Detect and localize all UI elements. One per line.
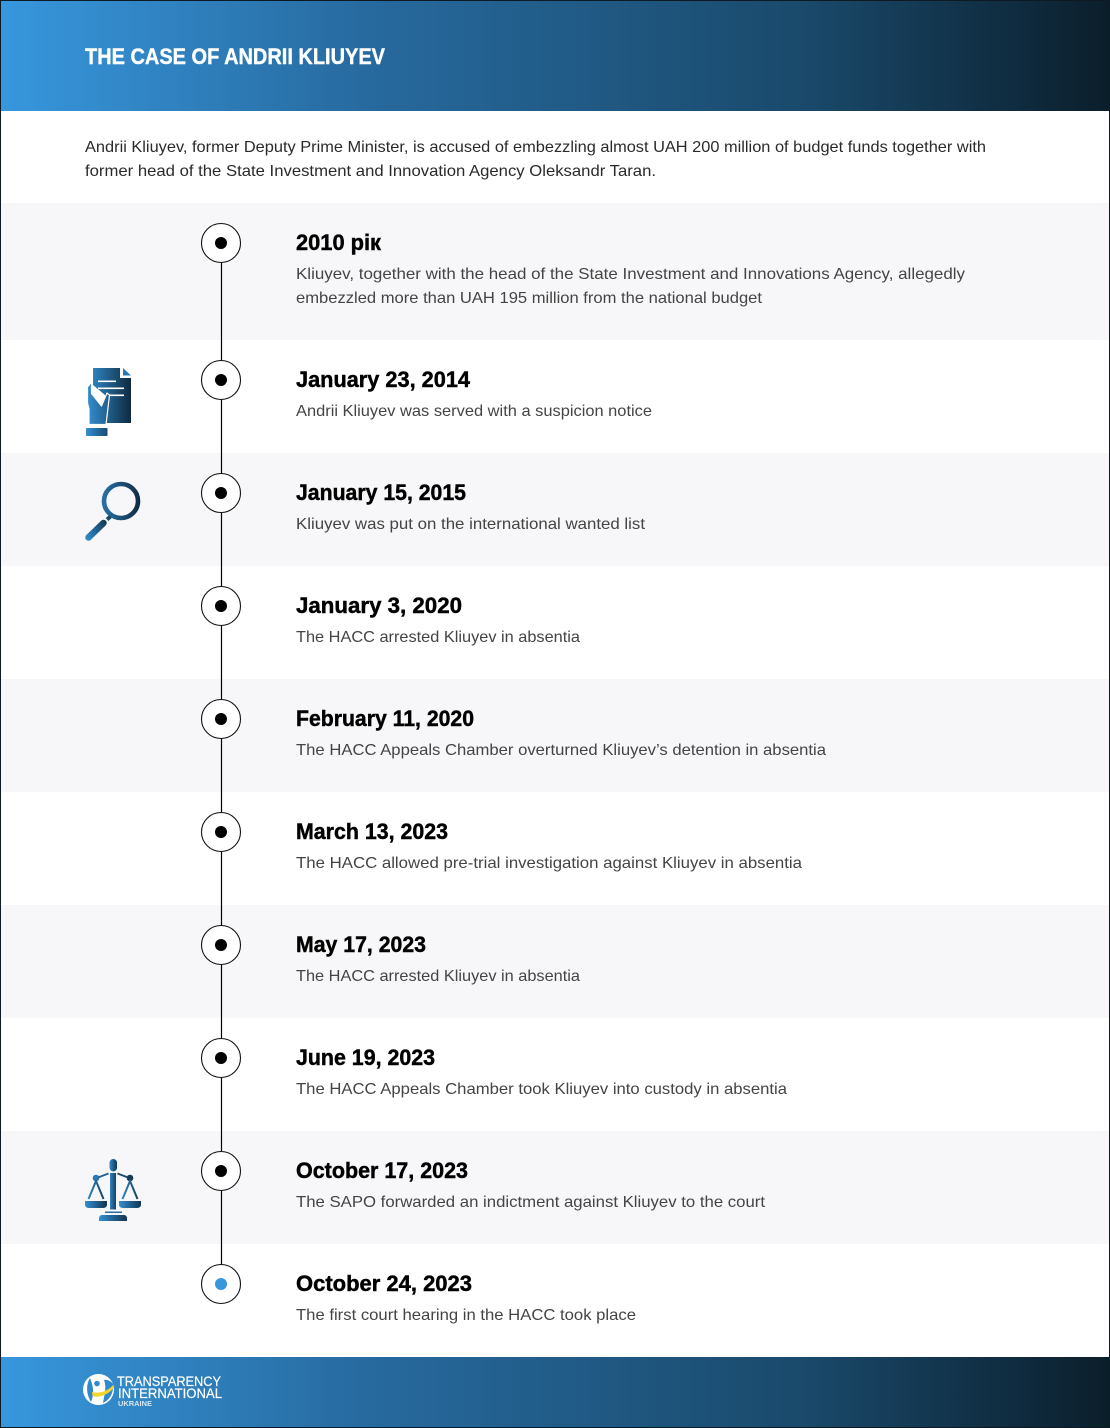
- event: January 15, 2015: January 15, 2015: [296, 480, 466, 505]
- event: May 17, 2023: [296, 932, 580, 985]
- footer band: [0, 1357, 1110, 1428]
- logo: Transparency International Ukraine: TRANSPARENCY: [117, 1373, 222, 1389]
- event: May 17, 2023: The HACC arrested Kliuyev in absentia: [296, 968, 580, 985]
- event: February 11, 2020: [296, 706, 826, 759]
- timeline markers: [202, 224, 240, 1304]
- icon: magnifying glass: [88, 484, 138, 538]
- intro text: [85, 139, 986, 180]
- event: March 13, 2023: [296, 819, 802, 872]
- event: January 23, 2014: Andrii Kliuyev was served with a suspicion notice: [296, 403, 652, 420]
- row backgrounds: [0, 203, 1110, 1244]
- event: October 17, 2023: October 17, 2023: [296, 1158, 468, 1183]
- icon: hand holding document: [86, 368, 131, 436]
- event: June 19, 2023: The HACC Appeals Chamber took Kliuyev into custody in absentia: [296, 1081, 787, 1098]
- header band: [0, 0, 1110, 111]
- event: June 19, 2023: [296, 1045, 787, 1098]
- event: May 17, 2023: May 17, 2023: [296, 932, 426, 957]
- icon: scales of justice: [85, 1159, 141, 1221]
- event: 2010: 2010 рік: [296, 230, 382, 255]
- event: March 13, 2023: The HACC allowed pre-trial investigation against Kliuyev in absentia: [296, 855, 802, 872]
- event: October 24, 2023: The first court hearing in the HACC took place: [296, 1307, 636, 1324]
- event: 2010: [296, 230, 965, 307]
- intro text: former head of the State Investment and Innovation Agency Oleksandr Taran.: [85, 163, 656, 180]
- event: June 19, 2023: June 19, 2023: [296, 1045, 435, 1070]
- event: October 24, 2023: October 24, 2023: [296, 1271, 472, 1296]
- intro text: Andrii Kliuyev, former Deputy Prime Minister, is accused of embezzling almost UAH 200 million of budget funds together with: [85, 139, 986, 156]
- event: March 13, 2023: March 13, 2023: [296, 819, 448, 844]
- event: January 15, 2015: [296, 480, 646, 533]
- logo: Transparency International Ukraine: [83, 1373, 222, 1408]
- event: January 3, 2020: The HACC arrested Kliuyev in absentia: [296, 629, 580, 646]
- event: January 23, 2014: January 23, 2014: [296, 367, 471, 392]
- event: January 3, 2020: January 3, 2020: [296, 593, 462, 618]
- event: 2010: embezzled more than UAH 195 million from the national budget: [296, 290, 763, 307]
- logo: Transparency International Ukraine: INTERNATIONAL: [118, 1385, 222, 1401]
- logo: Transparency International Ukraine: UKRAINE: [118, 1401, 152, 1408]
- event: February 11, 2020: The HACC Appeals Chamber overturned Kliuyev’s detention in absentia: [296, 742, 826, 759]
- event: 2010: Kliuyev, together with the head of the State Investment and Innovations Agency, allegedly: [296, 266, 965, 283]
- event: October 17, 2023: The SAPO forwarded an indictment against Kliuyev to the court: [296, 1194, 766, 1211]
- event: February 11, 2020: February 11, 2020: [296, 706, 474, 731]
- timeline axis: [220, 243, 222, 1284]
- event: October 17, 2023: [296, 1158, 766, 1211]
- event: October 24, 2023: [296, 1271, 636, 1324]
- event: January 15, 2015: Kliuyev was put on the international wanted list: [296, 516, 646, 533]
- title: THE CASE OF ANDRII KLIUYEV: [85, 44, 385, 69]
- event: January 23, 2014: [296, 367, 652, 420]
- event: January 3, 2020: [296, 593, 580, 646]
